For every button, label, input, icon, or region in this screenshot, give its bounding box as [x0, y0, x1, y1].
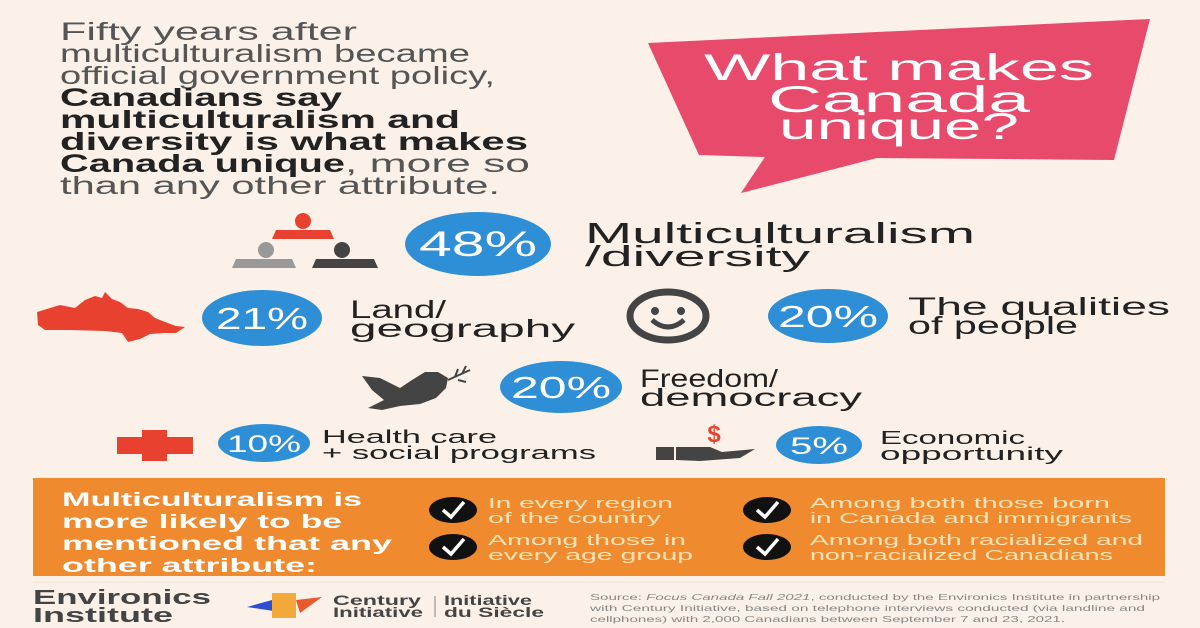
icon: dove: [362, 366, 470, 410]
stat: 48% multiculturalism: /diversity: [585, 241, 811, 273]
stat: 21% land: Land/: [350, 296, 446, 324]
stat: 20% qualities of people: 20%: [778, 299, 878, 334]
intro text: [60, 18, 530, 200]
summary heading: [62, 490, 393, 577]
stat: 5% economic: [776, 426, 1063, 464]
stat: 20% freedom: 20%: [511, 370, 611, 405]
icon: smiley: [630, 292, 706, 340]
logo: Environics Institute: Institute: [33, 605, 173, 627]
speech bubble title: What makes: [704, 47, 1094, 88]
stat: 20% qualities of people: [768, 289, 1170, 343]
check items: in Canada and immigrants: [810, 510, 1132, 527]
stat: 20% freedom: [500, 361, 863, 413]
intro text: Fifty years after: [60, 18, 357, 46]
logo: Century Initiative: [247, 592, 544, 620]
source note: Source: Focus Canada Fall 2021 , conducted by the Environics Institute in partnership: [590, 592, 1160, 602]
source note: cellphones) with 2,000 Canadians between September 7 and 23, 2021.: [590, 614, 1065, 624]
check items: of the country: [488, 510, 662, 527]
summary heading: Multiculturalism is: [62, 490, 362, 511]
icon: people: [232, 213, 378, 268]
check items: Among both racialized and: [810, 532, 1143, 549]
stat: 20% freedom: Freedom/: [640, 365, 778, 393]
check items: Among those in: [488, 532, 686, 549]
intro text: , more so: [345, 150, 530, 178]
check items: non-racialized Canadians: [810, 547, 1113, 564]
icon: canada map: [37, 292, 185, 342]
logo: Environics Institute: [33, 587, 211, 627]
intro text: multiculturalism and: [60, 106, 460, 134]
intro text: Canadians say: [60, 84, 342, 112]
stat: 10% health: Health care: [322, 427, 497, 447]
logo: Century Initiative: du Siècle: [444, 604, 544, 620]
stat: 21% land: geography: [350, 315, 576, 343]
icon: hand with dollar: [656, 421, 755, 461]
summary heading: more likely to be: [62, 512, 342, 533]
check items: In every region: [488, 495, 673, 512]
stat: 21% land: [202, 290, 576, 346]
intro text: diversity is what makes: [60, 128, 528, 156]
source note: with Century Initiative, based on telephone interviews conducted (via landline and: [588, 603, 1145, 613]
stat: 48% multiculturalism: [405, 212, 975, 276]
speech bubble title: [648, 19, 1150, 193]
icon: hand with dollar: $: [707, 421, 721, 448]
summary heading: mentioned that any: [62, 534, 393, 555]
stat: 21% land: 21%: [216, 301, 308, 336]
intro text: Canada unique: [60, 150, 345, 178]
stat: 5% economic: Economic: [880, 428, 1025, 448]
stat: 10% health: + social programs: [322, 443, 596, 463]
stat: 20% qualities of people: of people: [908, 312, 1078, 340]
stat: 20% qualities of people: The qualities: [908, 293, 1170, 321]
check items: [429, 495, 1143, 564]
check items: every age group: [488, 547, 693, 564]
logo: Century Initiative: Initiative: [333, 604, 423, 620]
stat: 5% economic: 5%: [790, 433, 848, 460]
source note: [588, 592, 1160, 624]
stat: 48% multiculturalism: 48%: [419, 225, 537, 264]
logo: Century Initiative: Century: [333, 592, 421, 608]
intro text: official government policy,: [60, 62, 495, 90]
speech bubble title: unique?: [779, 106, 1019, 147]
icon: cross: [117, 430, 193, 461]
stat: 20% freedom: democracy: [640, 384, 863, 412]
logo: Century Initiative: Initiative: [444, 592, 532, 608]
stat: 48% multiculturalism: Multiculturalism: [585, 218, 975, 250]
speech bubble title: Canada: [768, 79, 1031, 120]
stat: 5% economic: opportunity: [880, 444, 1063, 464]
intro text: multiculturalism became: [60, 40, 470, 68]
check items: Among both those born: [810, 495, 1110, 512]
summary heading: other attribute:: [62, 556, 317, 577]
stat: 10% health: 10%: [227, 431, 301, 458]
stat: 10% health: [218, 424, 596, 463]
logo: Environics Institute: Environics: [33, 587, 211, 609]
intro text: than any other attribute.: [60, 172, 500, 200]
panel: orange summary: [33, 478, 1165, 577]
